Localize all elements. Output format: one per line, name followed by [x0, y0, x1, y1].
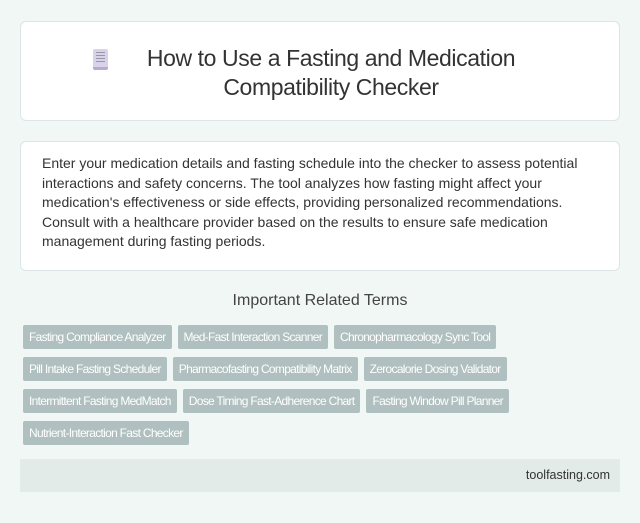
tags: Zerocalorie Dosing Validator: [370, 362, 501, 376]
icon: document: [93, 49, 108, 70]
description panel: Enter your medication details and fasting schedule into the checker to assess potential interactions and safety concerns. The tool analyzes how fasting might affect your medication's effectiveness or side effects, providing personalized recommendations. Consult with a healthcare provider based on the results to ensure safe medication management during fasting periods.: [42, 155, 577, 249]
footer: [20, 459, 620, 492]
tags: Pill Intake Fasting Scheduler: [29, 362, 161, 376]
footer: toolfasting.com: [526, 468, 610, 482]
title: How to Use a Fasting and Medication Compatibility Checker: [147, 45, 515, 100]
heading: related terms: Important Related Terms: [233, 292, 407, 309]
tags: Nutrient-Interaction Fast Checker: [29, 426, 183, 440]
tags: Med-Fast Interaction Scanner: [184, 330, 322, 344]
tags: Chronopharmacology Sync Tool: [340, 330, 490, 344]
tags: Intermittent Fasting MedMatch: [29, 394, 171, 408]
description panel: [20, 141, 620, 271]
header panel: [20, 21, 620, 121]
tags: Fasting Compliance Analyzer: [29, 330, 166, 344]
tags: Fasting Window Pill Planner: [372, 394, 503, 408]
tags: Dose Timing Fast-Adherence Chart: [189, 394, 354, 408]
tags: Pharmacofasting Compatibility Matrix: [179, 362, 352, 376]
